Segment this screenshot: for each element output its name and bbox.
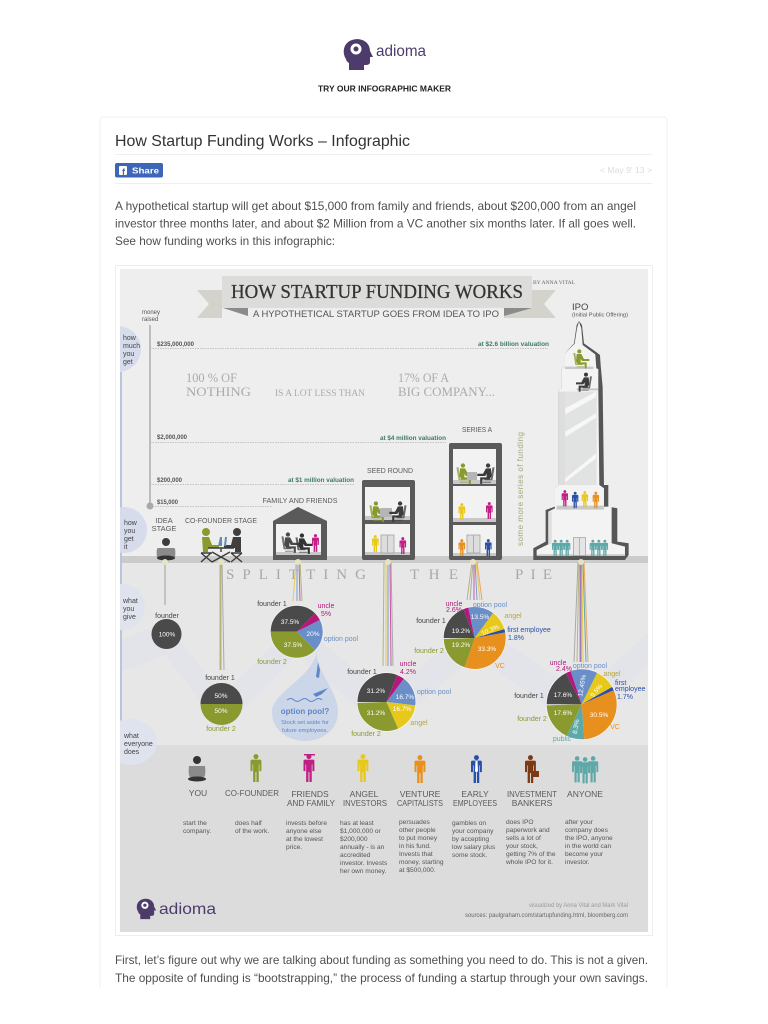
stage: co-founders xyxy=(185,516,257,562)
pie: IPO: founder 2 xyxy=(517,716,547,723)
callout: option pool drop xyxy=(272,652,338,741)
share button: Share xyxy=(132,166,159,176)
role: friends and family: at the lowest xyxy=(286,836,323,843)
intro paragraph: See how funding works in this infographic: xyxy=(115,234,335,248)
pie: series A: angel xyxy=(504,613,522,620)
callout: option pool drop: option pool? xyxy=(281,707,329,716)
pie: seed round: 16.7% xyxy=(396,694,414,701)
pie: IPO: 30.5% xyxy=(590,712,608,719)
role: angel investors: accredited xyxy=(340,852,371,859)
role: co-founder: CO-FOUNDER xyxy=(225,788,279,798)
title banner: A HYPOTHETICAL STARTUP GOES FROM IDEA TO IPO xyxy=(253,309,499,319)
role: co-founder xyxy=(225,754,279,835)
share button: f xyxy=(122,167,126,177)
side label: what you give xyxy=(120,584,138,630)
pie: series A: 2.6% xyxy=(446,607,462,614)
credits xyxy=(465,902,628,919)
pie: IPO: angel xyxy=(603,671,621,678)
intro paragraph xyxy=(115,199,636,248)
role: venture capitalists: other people xyxy=(399,827,436,834)
callout: option pool drop: future employees. xyxy=(282,728,328,734)
role: you: start the xyxy=(183,820,207,827)
role: anyone: company does xyxy=(565,827,609,834)
intro paragraph: A hypothetical startup will get about $15,000 from family and friends, about $200,000 from an angel xyxy=(115,199,636,213)
side label: what you give: give xyxy=(123,614,136,621)
pie: IPO: 17.6% xyxy=(554,692,572,699)
pie: idea stage xyxy=(152,613,182,649)
funding levels: $15,000 xyxy=(157,500,179,506)
pie: co-founder stage: 50% xyxy=(214,693,228,700)
role: early employees: by accepting xyxy=(452,836,489,843)
pie: seed round: founder 2 xyxy=(351,731,381,738)
pie: IPO: 2.4% xyxy=(556,666,572,673)
pie: seed round xyxy=(347,661,452,738)
share button xyxy=(115,163,163,178)
pie: series A: 33.3% xyxy=(478,646,496,653)
pie: seed round: 31.2% xyxy=(367,688,385,695)
infographic frame xyxy=(116,266,652,936)
pie: IPO: founder 1 xyxy=(514,693,544,700)
slogan: 100 % OF xyxy=(186,371,237,385)
header link: TRY OUR INFOGRAPHIC MAKER xyxy=(318,84,451,94)
side label: what everyone does: everyone xyxy=(124,741,153,748)
pie: family and friends: founder 2 xyxy=(257,659,287,666)
pie: IPO: 1.7% xyxy=(617,694,633,701)
pie: IPO: first xyxy=(615,680,626,687)
side label: how much you get: you xyxy=(123,351,134,358)
role: venture capitalists: VENTURE xyxy=(400,789,441,799)
pie: idea stage: founder xyxy=(155,613,180,620)
stage: idea: IDEA xyxy=(155,516,173,525)
connector pins xyxy=(162,559,584,565)
pie: series A: first employee xyxy=(507,627,551,634)
pie: series A: uncle xyxy=(446,601,462,608)
role: early employees: EARLY xyxy=(461,789,489,799)
role: anyone xyxy=(565,756,613,866)
infographic logo xyxy=(137,899,216,919)
role: you: company. xyxy=(183,828,211,835)
date: < May 9' 13 > xyxy=(600,166,652,175)
pie: IPO: 9.5% xyxy=(589,683,604,699)
pie: seed round: uncle xyxy=(400,661,416,668)
pie: series A: founder 1 xyxy=(416,618,446,625)
pie: seed round: 31.2% xyxy=(367,710,385,717)
side label: how you get it: get xyxy=(124,536,134,543)
money axis xyxy=(142,310,160,510)
pie: seed round: 4.2% xyxy=(400,669,416,676)
role: angel investors: ANGEL xyxy=(350,789,379,799)
role: friends and family: price. xyxy=(286,844,302,851)
role: investment bankers: does IPO xyxy=(506,819,534,826)
role: venture capitalists xyxy=(397,755,444,874)
side label: how you get it: you xyxy=(124,528,135,535)
role: investment bankers: paperwork and xyxy=(506,827,550,834)
pie: IPO: VC xyxy=(610,724,620,731)
funding levels: at $2.6 billion valuation xyxy=(478,341,549,348)
role: venture capitalists: money, starting xyxy=(399,859,444,866)
side label: what you give: you xyxy=(123,606,134,613)
pie: series A: 1.8% xyxy=(508,635,524,642)
role: angel investors: $200,000 xyxy=(340,836,368,843)
pie: co-founder stage xyxy=(200,675,242,733)
funding levels xyxy=(150,341,549,506)
pie: family and friends xyxy=(257,601,359,666)
pie: IPO: 12.45% xyxy=(577,674,588,697)
article title: How Startup Funding Works – Infographic xyxy=(115,133,410,150)
role: anyone: ANYONE xyxy=(567,789,603,799)
stage: family and friends xyxy=(262,496,338,560)
pie: series A: 13.5% xyxy=(471,614,489,621)
pie: IPO: uncle xyxy=(550,660,566,667)
role: investment bankers: your stock, xyxy=(506,843,538,850)
role: early employees: EMPLOYEES xyxy=(453,798,497,808)
credits: sources: paulgraham.com/startupfunding.html, bloomberg.com xyxy=(465,912,628,919)
stage: family and friends: FAMILY AND FRIENDS xyxy=(262,496,338,505)
byline: BY ANNA VITAL xyxy=(533,280,576,286)
pie: seed round: angel xyxy=(410,720,428,727)
role: investment bankers: getting 7% of the xyxy=(506,851,556,858)
role: angel investors: annually - is an xyxy=(340,844,385,851)
pie: IPO xyxy=(514,660,645,743)
infographic xyxy=(95,269,648,932)
pie: series A: 10.3% xyxy=(481,623,500,638)
pie: family and friends: 5% xyxy=(321,611,331,618)
role: venture capitalists: CAPITALISTS xyxy=(397,798,443,808)
side label: how you get it: it xyxy=(124,544,128,551)
pie: co-founder stage: founder 2 xyxy=(206,726,236,733)
header logo: adioma xyxy=(376,43,426,60)
title banner: HOW STARTUP FUNDING WORKS xyxy=(231,281,523,303)
stage: idea xyxy=(152,516,176,560)
role: anyone: the IPO, anyone xyxy=(565,835,613,842)
funding levels: $2,000,000 xyxy=(157,435,188,441)
infographic logo: adioma xyxy=(159,901,216,918)
callout: option pool drop: Stock set aside for xyxy=(281,720,329,726)
role: anyone: after your xyxy=(565,819,594,826)
funding levels: $200,000 xyxy=(157,478,183,484)
stage: series A xyxy=(449,425,502,560)
pie: co-founder stage: founder 1 xyxy=(205,675,235,682)
side rail xyxy=(120,372,122,720)
pie: series A: option pool xyxy=(473,602,508,609)
side label: how you get it: how xyxy=(124,520,138,527)
section title: splitting the pie: THE xyxy=(410,567,458,583)
role: friends and family: anyone else xyxy=(286,828,322,835)
side label: how much you get: much xyxy=(123,343,140,350)
role: friends and family: invests before xyxy=(286,820,327,827)
role: early employees: low salary plus xyxy=(452,844,496,851)
slogan: 17% OF A xyxy=(398,371,449,385)
role: co-founder: does half xyxy=(235,820,262,827)
role: venture capitalists: Invests that xyxy=(399,851,433,858)
pie: series A: VC xyxy=(495,663,505,670)
stage: seed round xyxy=(362,466,415,560)
pie: series A: 19.2% xyxy=(452,628,470,635)
role: angel investors: $1,000,000 or xyxy=(340,828,382,835)
role: anyone: in the world can xyxy=(565,843,612,850)
role: early employees: your company xyxy=(452,828,494,835)
vertical note: some more series of funding xyxy=(516,432,525,546)
section title: splitting the pie: SPLITTING xyxy=(226,567,366,583)
role: anyone: investor. xyxy=(565,859,590,866)
pie: seed round: 16.7% xyxy=(393,706,411,713)
role: venture capitalists: persuades xyxy=(399,819,430,826)
slogan: IS A LOT LESS THAN xyxy=(275,388,366,398)
pie: family and friends: uncle xyxy=(318,603,334,610)
funding levels: $235,000,000 xyxy=(157,342,195,348)
closing paragraph: The opposite of funding is “bootstrapping,” the process of funding a startup through your own savings. xyxy=(115,971,648,985)
side label: what everyone does: what xyxy=(123,733,139,740)
pie: series A xyxy=(414,601,551,670)
role: investment bankers: sells a lot of xyxy=(506,835,541,842)
title banner xyxy=(197,276,556,319)
role: friends and family: FRIENDS xyxy=(291,789,329,799)
role: investment bankers: INVESTMENT xyxy=(507,789,557,799)
slogan: BIG COMPANY... xyxy=(398,384,495,399)
side label: what you give: what xyxy=(122,598,138,605)
pie: series A: 19.2% xyxy=(452,642,470,649)
role: venture capitalists: in his fund. xyxy=(399,843,431,850)
role: angel investors: has at least xyxy=(340,820,374,827)
role: investment bankers: whole IPO for it. xyxy=(505,859,553,866)
role: you: YOU xyxy=(189,788,207,798)
role: angel investors: investor. Invests xyxy=(340,860,388,867)
side label: what everyone does: does xyxy=(124,749,140,756)
stage: IPO skyscraper: IPO xyxy=(572,302,588,313)
role: angel investors: her own money. xyxy=(340,868,387,875)
connector strings xyxy=(165,562,588,670)
pie: family and friends: option pool xyxy=(324,636,359,643)
pie: family and friends: 20% xyxy=(306,631,320,638)
role: you xyxy=(183,756,211,835)
role: early employees: gambles on xyxy=(452,820,486,827)
pie: family and friends: 37.5% xyxy=(281,619,299,626)
credits: visualized by Anna Vital and Mark Vital xyxy=(529,902,628,909)
money axis: raised xyxy=(142,317,158,323)
stage: series A: SERIES A xyxy=(462,425,492,434)
role: early employees: some stock. xyxy=(452,852,487,859)
funding levels: at $1 million valuation xyxy=(288,477,354,484)
pie: family and friends: founder 1 xyxy=(257,601,287,608)
role: investment bankers xyxy=(505,755,557,866)
role: venture capitalists: at $500,000. xyxy=(399,867,436,874)
role: early employees xyxy=(452,755,497,859)
pie: IPO: 8.3% xyxy=(572,719,581,735)
stage: idea: STAGE xyxy=(152,524,176,533)
stage: seed round: SEED ROUND xyxy=(367,466,414,475)
pie: seed round: option pool xyxy=(417,689,452,696)
stage: co-founders: CO-FOUNDER STAGE xyxy=(185,516,257,525)
side label: how you get it xyxy=(120,507,147,553)
side label: how much you get: get xyxy=(123,359,133,366)
stage: IPO skyscraper xyxy=(533,302,629,560)
slogan: NOTHING xyxy=(186,384,251,399)
article card xyxy=(100,117,667,988)
pie: seed round: founder 1 xyxy=(347,669,377,676)
pie: family and friends: 37.5% xyxy=(284,642,302,649)
header logo xyxy=(344,39,426,70)
pie: series A: founder 2 xyxy=(414,648,444,655)
role: friends and family xyxy=(286,754,335,851)
role: anyone: become your xyxy=(565,851,604,858)
funding levels: at $4 million valuation xyxy=(380,435,446,442)
side label: how much you get: how xyxy=(123,335,137,342)
pie: IPO: option pool xyxy=(573,663,608,670)
role: venture capitalists: to put money xyxy=(399,835,438,842)
pie: idea stage: 100% xyxy=(159,632,176,638)
side label: how much you get xyxy=(120,326,141,372)
slogan xyxy=(186,374,494,396)
role: angel investors xyxy=(340,754,388,875)
section title: splitting the pie: PIE xyxy=(515,567,552,583)
role: co-founder: of the work. xyxy=(235,828,269,835)
money axis: money xyxy=(142,310,160,316)
side label: what everyone does xyxy=(120,720,156,765)
pie: IPO: employee xyxy=(615,686,645,693)
closing paragraph: First, let’s figure out why we are talking about funding as something you need to do. This is not a given. xyxy=(115,953,648,967)
intro paragraph: investor three months later, and about $2 Million from a VC another six months later. If all goes well. xyxy=(115,216,636,230)
stage: IPO skyscraper: (Initial Public Offering) xyxy=(572,312,628,318)
closing paragraph xyxy=(115,953,648,985)
role: friends and family: AND FAMILY xyxy=(287,798,335,808)
section title: splitting the pie xyxy=(227,570,552,579)
pie: IPO: public xyxy=(553,736,572,743)
pie: IPO: 17.6% xyxy=(554,710,572,717)
pie: co-founder stage: 50% xyxy=(214,708,228,715)
role: angel investors: INVESTORS xyxy=(343,798,387,808)
role: investment bankers: BANKERS xyxy=(512,798,553,808)
